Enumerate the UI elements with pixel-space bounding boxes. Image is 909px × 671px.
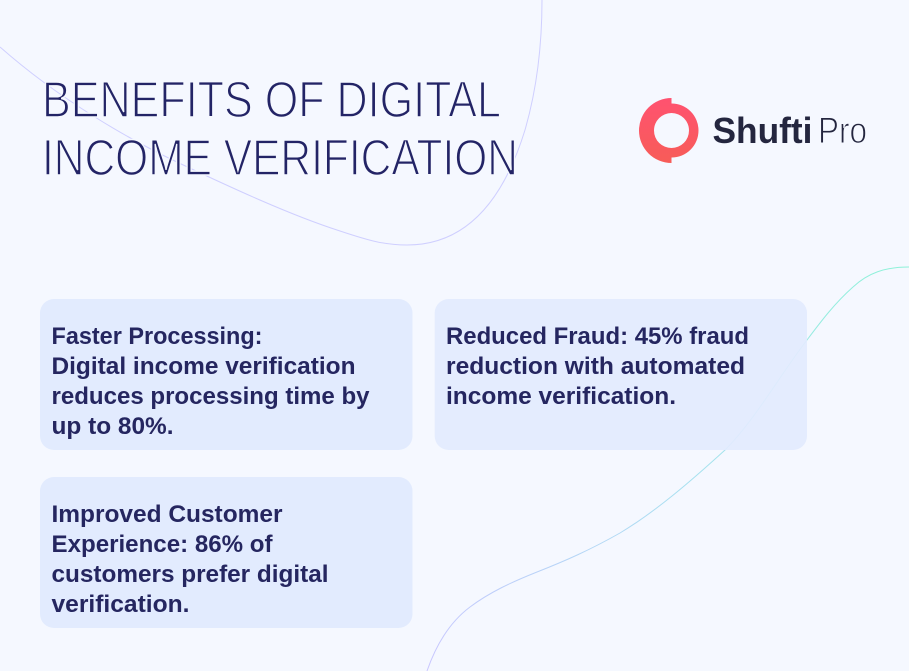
logo wordmark [712, 110, 867, 151]
text: faster processing: Faster Processing: [52, 323, 262, 350]
text: reduced fraud: income verification. [446, 383, 676, 410]
panel: reduced fraud [435, 299, 807, 450]
title: INCOME VERIFICATION [42, 129, 518, 186]
text: reduced fraud [446, 323, 749, 410]
text: faster processing: up to 80%. [52, 413, 174, 440]
text: reduced fraud: reduction with automated [446, 353, 745, 380]
title: BENEFITS OF DIGITAL [42, 71, 501, 128]
decorative curve: bottom right [427, 267, 909, 671]
text: improved customer experience: Improved Customer [52, 501, 282, 528]
panel: improved customer experience [40, 477, 412, 628]
logo wordmark: Shufti [712, 110, 812, 151]
text: faster processing: reduces processing time by [52, 383, 370, 410]
text: improved customer experience: Experience: 86% of [52, 531, 274, 558]
text: faster processing: Digital income verification [52, 353, 356, 380]
icon: logo ring [639, 98, 698, 163]
text: faster processing [52, 323, 370, 440]
text: improved customer experience: customers prefer digital [52, 561, 328, 588]
decorative curve: top left [0, 0, 542, 245]
text: improved customer experience: verification. [52, 591, 190, 618]
logo wordmark: Pro [818, 110, 867, 151]
title [42, 71, 518, 186]
text: reduced fraud: Reduced Fraud: 45% fraud [446, 323, 749, 350]
text: improved customer experience [52, 501, 328, 618]
panel: faster processing [40, 299, 412, 450]
logo: Shufti Pro [639, 98, 867, 163]
